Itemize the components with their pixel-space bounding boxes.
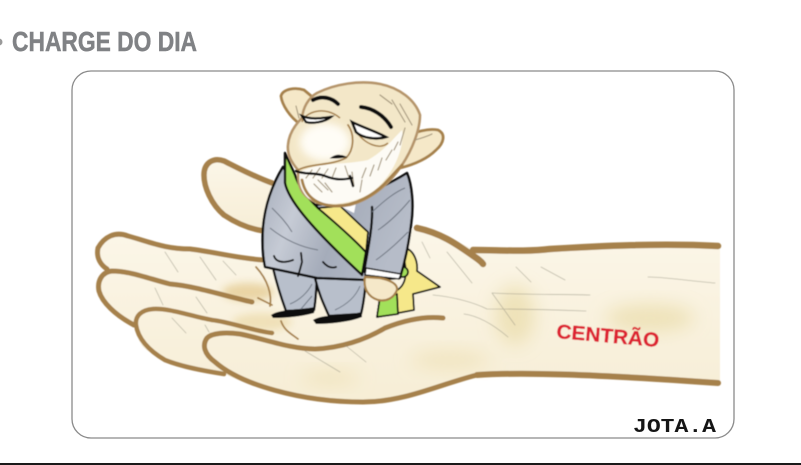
figure: nose highlight: [300, 123, 350, 161]
figure: eye bags: [302, 111, 388, 146]
hand: palm and wrist fill: [96, 228, 720, 402]
figure: chin contour: [302, 165, 402, 206]
figure: left eye: [302, 116, 331, 123]
figure: beard: [299, 130, 403, 204]
figure: shirt collar: [340, 203, 356, 213]
figure: presidential sash green band: [285, 153, 366, 275]
figure: head: [288, 82, 420, 206]
figure: presidential sash yellow band: [318, 206, 368, 252]
figure: nostril: [331, 155, 346, 158]
title: CHARGE DO DIA: [12, 26, 197, 57]
hand: gray crease lines: [155, 242, 715, 372]
figure: right ear: [400, 129, 443, 168]
figure: eyebrows: [313, 97, 391, 127]
figure: nose contour: [298, 125, 353, 170]
figure: beard strokes: [296, 95, 432, 192]
figure: mouth: [296, 171, 353, 186]
hand: [96, 160, 720, 402]
figure: left ear: [281, 89, 316, 124]
figure: hanging sash end: [377, 248, 440, 317]
panel: cartoon frame: [72, 71, 734, 438]
figure: suit jacket: [263, 167, 412, 280]
hand: back finger: [203, 160, 290, 231]
figure: sleeve cuff: [365, 268, 401, 279]
figure: jacket details: [274, 207, 372, 276]
figure: trouser folds: [290, 284, 360, 310]
figure: right eye: [352, 122, 386, 138]
signature: JOTA.A: JOTA.A: [633, 416, 717, 438]
figure: hand: [365, 277, 397, 301]
figure: president: [263, 82, 443, 324]
figure: jacket fold lines: [270, 188, 410, 260]
figure: legs: [273, 268, 366, 316]
hand: brown contour lines: [98, 160, 718, 402]
illustration: hand holding figure: [96, 82, 720, 402]
bullet marker: [0, 38, 2, 46]
label: CENTRÃO: CENTRÃO: [556, 320, 660, 352]
hand: shading: [222, 283, 695, 386]
figure: shoes: [271, 307, 362, 324]
bottom border line: [0, 463, 801, 465]
